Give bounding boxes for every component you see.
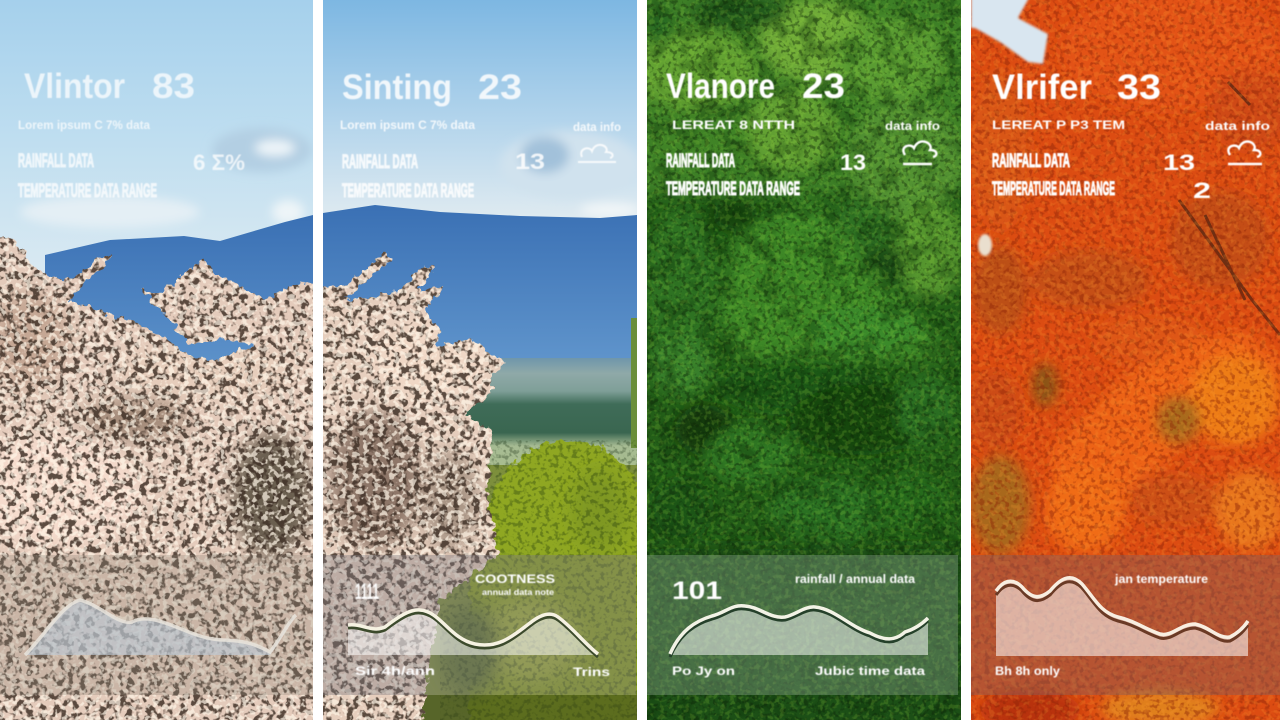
- text block: second panel header: 23: [478, 68, 522, 107]
- text block: fourth panel header: LEREAT P P3 TEM: [992, 118, 1125, 132]
- text block: second panel header: [340, 68, 621, 202]
- mountain: [323, 205, 637, 365]
- chart text: second panel: COOTNESS: [475, 572, 555, 586]
- icon: cloud: [903, 142, 936, 164]
- chart: third panel: [670, 606, 928, 657]
- chart text: second panel: 1111: [355, 579, 379, 604]
- chart text: third panel: Po Jy on: [672, 664, 735, 678]
- chart text: fourth panel: [995, 572, 1208, 678]
- text block: third panel header: data info: [885, 119, 940, 133]
- green hill: [470, 440, 652, 720]
- hill shading: [440, 470, 628, 695]
- text block: first panel header: RAINFALL DATA: [18, 151, 94, 172]
- text block: third panel header: Vlanore: [666, 67, 775, 106]
- text block: second panel header: Lorem ipsum C 7% data: [340, 118, 475, 132]
- panel: second season valley: [323, 0, 652, 720]
- text block: first panel header: 6 Σ%: [193, 150, 245, 175]
- chart text: fourth panel: jan temperature: [1114, 572, 1208, 586]
- chart text: third panel: [672, 572, 925, 678]
- chart text: second panel: Sir 4h/ann: [355, 664, 435, 678]
- text block: fourth panel header: 2: [1193, 178, 1211, 203]
- foliage: [971, 76, 1280, 720]
- overlay band: first panel: [0, 555, 313, 695]
- text block: third panel header: [666, 67, 940, 200]
- chart text: third panel: rainfall / annual data: [795, 572, 915, 586]
- divider bars: [313, 0, 971, 720]
- chart: second panel: [348, 610, 598, 657]
- overlay band: third panel: [647, 555, 958, 695]
- cloud: [20, 128, 312, 228]
- mountain: [45, 215, 313, 362]
- text block: fourth panel header: RAINFALL DATA: [992, 151, 1070, 172]
- valley: [464, 358, 637, 465]
- text block: third panel header: 23: [802, 67, 845, 106]
- text block: third panel header: TEMPERATURE DATA RANGE: [666, 179, 800, 200]
- icon: cloud: [578, 145, 616, 162]
- overlay band: second panel: [323, 555, 636, 695]
- foliage: [647, 0, 961, 720]
- text block: fourth panel header: 13: [1163, 150, 1195, 175]
- text block: fourth panel header: 33: [1117, 68, 1161, 107]
- chart text: third panel: Jubic time data: [815, 664, 925, 678]
- branches: [1179, 82, 1280, 335]
- text block: third panel header: RAINFALL DATA: [666, 151, 735, 172]
- text block: third panel header: LEREAT 8 NTTH: [672, 118, 795, 132]
- overlay band: fourth panel: [971, 555, 1280, 695]
- text block: first panel header: 83: [152, 67, 195, 106]
- lower ground: [420, 465, 637, 720]
- chart text: second panel: [355, 572, 610, 679]
- text block: fourth panel header: [992, 68, 1270, 203]
- text block: first panel header: Lorem ipsum C 7% data: [18, 118, 150, 132]
- text block: fourth panel header: data info: [1205, 119, 1270, 133]
- chart text: second panel: Trins: [573, 665, 610, 679]
- text block: second panel header: 13: [515, 149, 545, 174]
- sky: [0, 0, 313, 280]
- panel: third season forest: [647, 0, 961, 720]
- chart: fourth panel: [996, 578, 1248, 656]
- panel: fourth season autumn: [969, 0, 1280, 720]
- cloud: [500, 131, 640, 217]
- chart text: third panel: 101: [672, 577, 722, 605]
- white speck: [978, 234, 992, 256]
- text block: fourth panel header: TEMPERATURE DATA RANGE: [992, 179, 1115, 200]
- chart text: fourth panel: Bh 8h only: [995, 664, 1060, 678]
- text block: first panel header: [18, 67, 245, 202]
- text block: second panel header: Sinting: [342, 68, 452, 107]
- text block: third panel header: 13: [840, 150, 866, 175]
- thin tree: [631, 318, 637, 448]
- text block: second panel header: TEMPERATURE DATA RANGE: [342, 181, 474, 202]
- text block: fourth panel header: Vlrifer: [992, 68, 1092, 107]
- sky gap: [971, 0, 1048, 64]
- text block: first panel header: Vlintor: [24, 67, 125, 106]
- panel: first season blossom: [0, 0, 313, 720]
- sky: [323, 0, 637, 225]
- blossom tree: [0, 230, 313, 720]
- chart text: second panel: annual data note: [482, 588, 555, 597]
- text block: first panel header: TEMPERATURE DATA RANGE: [18, 181, 157, 202]
- blossom tree: [323, 250, 513, 720]
- text block: second panel header: data info: [573, 120, 621, 134]
- chart: first panel: [25, 600, 296, 655]
- text block: second panel header: RAINFALL DATA: [342, 152, 418, 173]
- icon: cloud: [1228, 142, 1262, 164]
